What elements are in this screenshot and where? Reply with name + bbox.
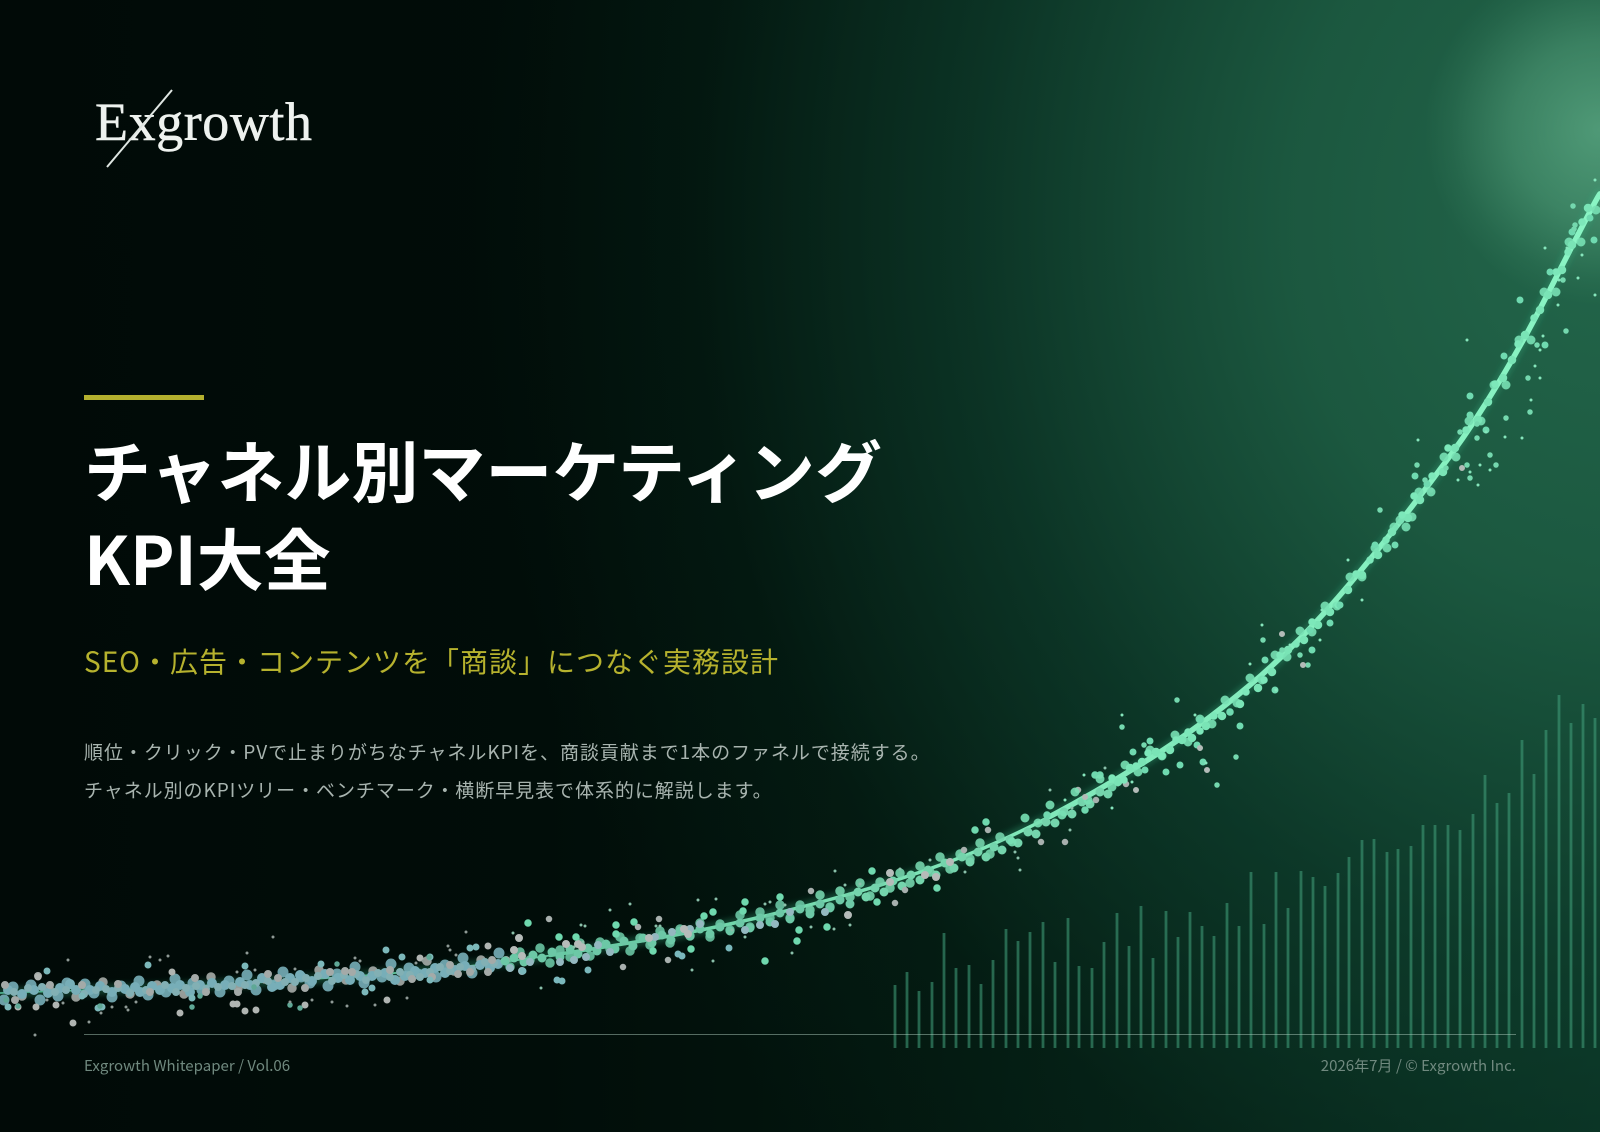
title <box>84 420 882 605</box>
accent bar <box>84 395 204 400</box>
description: 順位・クリック・PVで止まりがちなチャネルKPIを、商談貢献まで1本のファネルで接続する。 <box>84 738 931 765</box>
description: チャネル別のKPIツリー・ベンチマーク・横断早見表で体系的に解説します。 <box>84 776 773 803</box>
description <box>84 738 931 803</box>
particles: right bright cluster <box>1012 180 1596 842</box>
logo: Exgrowth <box>95 92 312 152</box>
footer left: Exgrowth Whitepaper / Vol.06 <box>84 1055 290 1076</box>
title: チャネル別マーケティング <box>84 420 882 517</box>
particles: left blue-grey cluster <box>4 932 506 1035</box>
particles: middle green cluster <box>505 768 1126 988</box>
subtitle: SEO・広告・コンテンツを「商談」につなぐ実務設計 <box>84 641 779 681</box>
footer right: 2026年7月 / © Exgrowth Inc. <box>1321 1055 1516 1076</box>
footer rule <box>84 1034 1516 1035</box>
title: KPI大全 <box>84 508 331 605</box>
